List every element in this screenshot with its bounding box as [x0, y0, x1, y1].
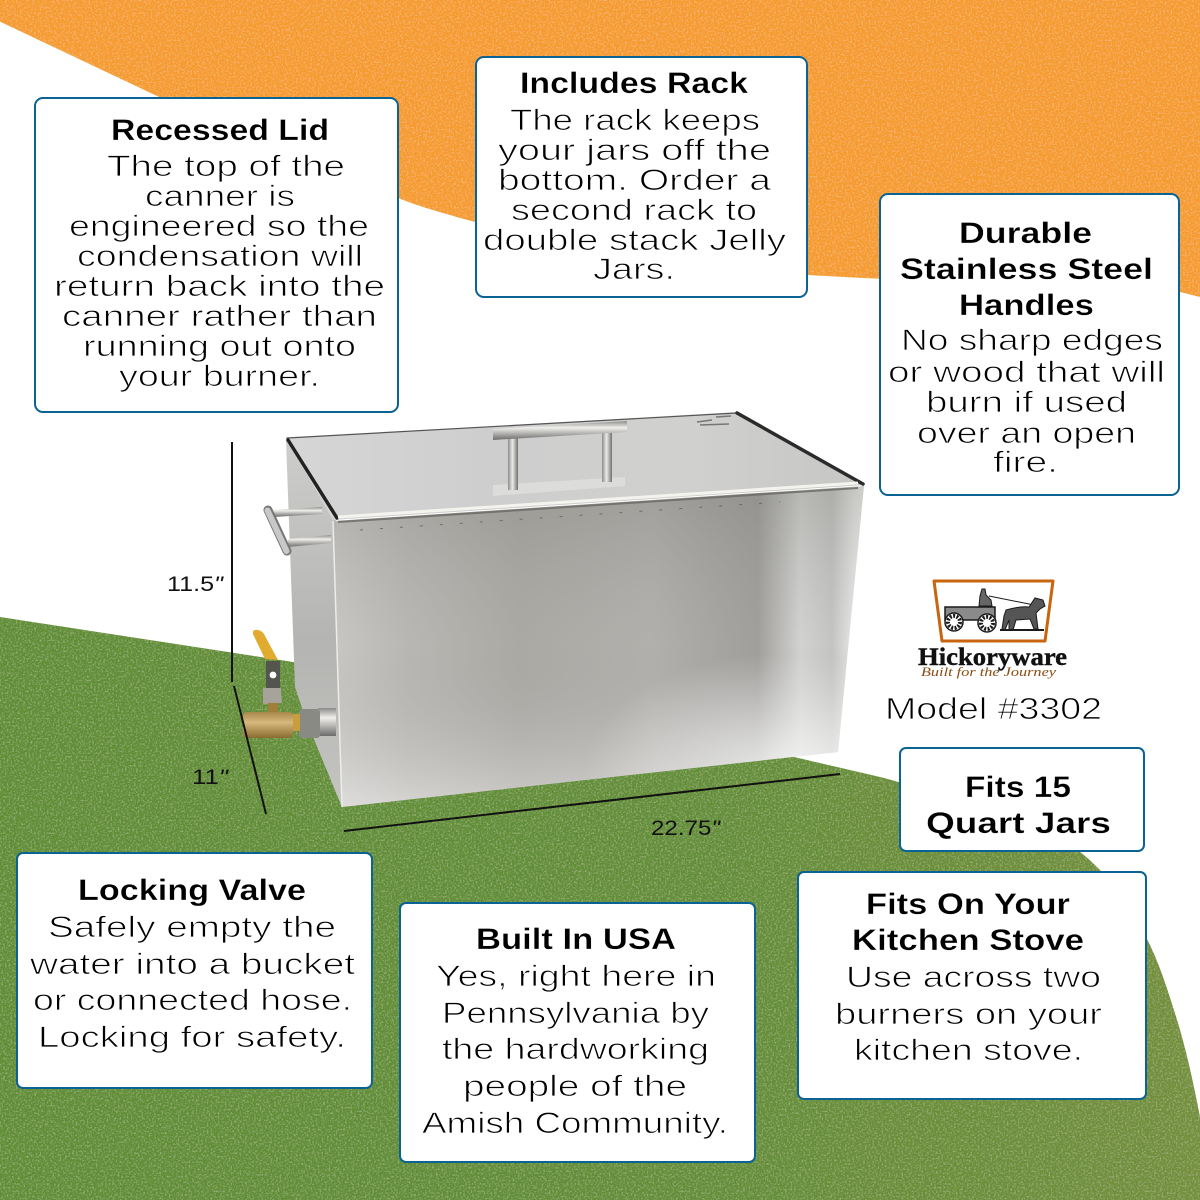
text: includes rack description: double stack Jelly [483, 224, 786, 257]
text: locking valve description: Locking for safety. [38, 1021, 346, 1054]
text: includes rack description: Jars. [593, 253, 675, 286]
icon: horse and wagon [945, 589, 1045, 632]
ball valve [243, 630, 300, 738]
dimension: depth line [234, 686, 266, 814]
heading: durable stainless steel handles: Stainless Steel [900, 253, 1153, 286]
text: recessed lid description: engineered so the [69, 210, 369, 243]
text: durable handles description: over an open [917, 417, 1136, 450]
text: recessed lid description: The top of the [107, 150, 345, 183]
text: recessed lid description [54, 150, 385, 393]
text: includes rack description: bottom. Order a [498, 164, 771, 197]
heading: fits 15 quart jars: Fits 15 [965, 771, 1071, 804]
lid recess edge [287, 413, 863, 518]
text: kitchen stove description: Use across two [846, 961, 1101, 994]
dimension: width label: 22.75 " [651, 817, 722, 840]
text: locking valve description [29, 911, 356, 1054]
text: durable handles description [888, 324, 1165, 479]
heading: durable stainless steel handles: Handles [959, 289, 1094, 322]
canner left side [286, 440, 342, 807]
heading: fits on your kitchen stove: Fits On Your [866, 888, 1070, 921]
model number: Model #3302 [885, 691, 1102, 726]
panel: includes rack [476, 57, 807, 297]
text: locking valve description: water into a bucket [29, 948, 356, 981]
text: built in usa description: people of the [463, 1070, 687, 1103]
heading: locking valve: Locking Valve [78, 874, 306, 907]
canner lid [286, 412, 864, 520]
text: includes rack description: second rack to [511, 194, 757, 227]
text: built in usa description [422, 960, 728, 1140]
text: durable handles description: or wood that will [888, 356, 1165, 389]
background: green swoosh [0, 617, 1200, 1200]
logo wordmark: Hickoryware [918, 644, 1067, 671]
text: built in usa description: Yes, right here in [436, 960, 716, 993]
heading: durable stainless steel handles [900, 217, 1153, 322]
text: kitchen stove description [835, 961, 1102, 1067]
text: includes rack description: The rack keeps [510, 104, 760, 137]
lid handle [493, 421, 627, 496]
text: durable handles description: fire. [993, 446, 1058, 479]
panel: locking valve [17, 853, 372, 1088]
heading: recessed lid: Recessed Lid [111, 114, 329, 147]
text: recessed lid description: canner rather than [62, 300, 377, 333]
text: recessed lid description: your burner. [119, 360, 320, 393]
text: recessed lid description: return back into the [54, 270, 385, 303]
text: kitchen stove description: burners on your [835, 998, 1102, 1031]
panel: recessed lid [35, 98, 398, 412]
canner front face [333, 483, 864, 807]
text: kitchen stove description: kitchen stove. [854, 1034, 1083, 1067]
dimension: height line [231, 442, 233, 682]
heading: durable stainless steel handles: Durable [959, 217, 1092, 250]
logo badge frame [934, 581, 1053, 641]
logo tagline: Built for the Journey [921, 664, 1056, 679]
heading: includes rack: Includes Rack [520, 67, 748, 100]
heading: fits 15 quart jars [926, 771, 1111, 840]
text: durable handles description: burn if used [926, 386, 1127, 419]
illustration: stainless steel canner [243, 412, 864, 807]
text: recessed lid description: condensation will [77, 240, 363, 273]
lid maker mark [697, 416, 731, 425]
panel: built in usa [400, 903, 755, 1162]
heading: fits 15 quart jars: Quart Jars [926, 807, 1111, 840]
text: includes rack description [483, 104, 786, 286]
panel: durable handles [880, 194, 1179, 495]
heading: fits on your kitchen stove: Kitchen Stove [852, 924, 1084, 957]
text: includes rack description: your jars off the [498, 134, 771, 167]
logo: hickoryware [918, 581, 1067, 679]
text: built in usa description: the hardworking [442, 1033, 709, 1066]
background: orange swoosh [0, 0, 1200, 297]
panel: fits 15 quart jars [900, 748, 1144, 851]
heading: built in usa: Built In USA [476, 923, 676, 956]
side handle [268, 507, 331, 551]
text: locking valve description: or connected hose. [33, 984, 352, 1017]
dimension: width line [344, 774, 840, 831]
text: recessed lid description: canner is [145, 180, 295, 213]
dimension: depth label: 11" [192, 766, 230, 789]
heading: fits on your kitchen stove [852, 888, 1084, 957]
text: locking valve description: Safely empty the [48, 911, 336, 944]
text: built in usa description: Pennsylvania by [442, 997, 709, 1030]
text: recessed lid description: running out onto [83, 330, 356, 363]
dimension: height label: 11.5 " [167, 573, 225, 596]
panel: fits on kitchen stove [798, 872, 1146, 1099]
text: durable handles description: No sharp edges [901, 324, 1163, 357]
text: built in usa description: Amish Community. [422, 1107, 728, 1140]
drain pipe [299, 708, 336, 738]
